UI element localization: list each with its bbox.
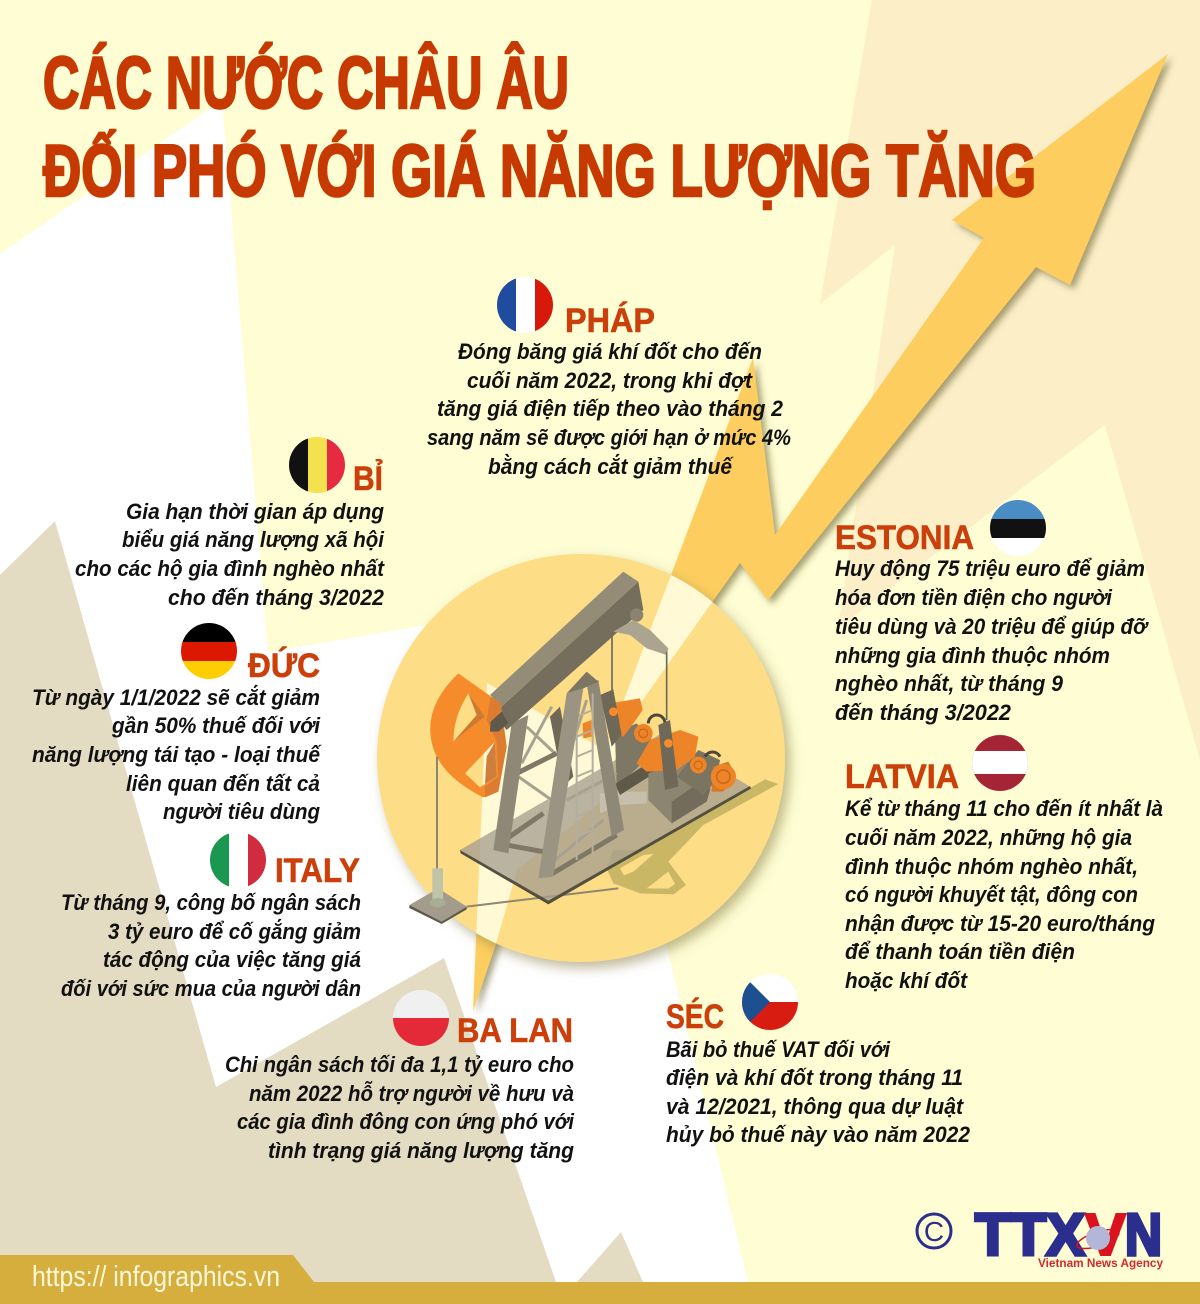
panel: Germany: liên quan đến tất cả [126, 771, 320, 796]
title [43, 43, 1036, 212]
rising arrow [473, 54, 1168, 1011]
panel: Italy: 3 tỷ euro để cố gắng giảm [108, 919, 361, 944]
panel: Belgium: cho đến tháng 3/2022 [168, 585, 385, 610]
icon: Italy flag [210, 832, 267, 888]
panel: Estonia [835, 500, 1149, 725]
panel: Italy [61, 832, 361, 1001]
icon: Latvia flag [972, 735, 1028, 791]
icon: Estonia flag [990, 500, 1046, 556]
footer bar with URL: https:// infographics.vn [32, 1261, 280, 1293]
panel: France: sang năm sẽ được giới hạn ở mức 4% [427, 425, 791, 450]
panel: Poland: Chi ngân sách tối đa 1,1 tỷ euro cho [225, 1052, 574, 1077]
icon: oil pump jack [409, 572, 778, 924]
panel: Czech Republic: Bãi bỏ thuế VAT đối với [666, 1037, 891, 1062]
icon: Czech flag [742, 974, 798, 1030]
panel: Latvia: LATVIA [845, 758, 959, 796]
panel: Poland [225, 990, 575, 1163]
panel: Estonia: hóa đơn tiền điện cho người [835, 585, 1113, 610]
panel: Czech Republic: SÉC [666, 998, 724, 1036]
panel: Germany: ĐỨC [248, 647, 320, 685]
panel: Poland: năm 2022 hỗ trợ người về hưu và [249, 1081, 574, 1106]
central circle with oil pump [374, 553, 797, 976]
panel: Latvia: hoặc khí đốt [845, 968, 969, 993]
title: CÁC NƯỚC CHÂU ÂU [43, 43, 569, 124]
panel: France: cuối năm 2022, trong khi đợt [467, 368, 754, 393]
panel: Italy: ITALY [275, 852, 360, 890]
panel: Latvia [845, 735, 1163, 993]
panel: Czech Republic: điện và khí đốt trong tháng 11 [666, 1065, 963, 1090]
panel: Germany: năng lượng tái tạo - loại thuế [32, 742, 323, 767]
panel: Germany: người tiêu dùng [163, 799, 321, 824]
logo: TTXVN Vietnam News Agency: TTX [975, 1202, 1085, 1268]
panel: Latvia: cuối năm 2022, những hộ gia [845, 825, 1132, 850]
panel: Italy: đối với sức mua của người dân [61, 976, 361, 1001]
panel: Estonia: Huy động 75 triệu euro để giảm [835, 556, 1145, 581]
panel: Estonia: ESTONIA [835, 519, 974, 557]
panel: Germany: Từ ngày 1/1/2022 sẽ cắt giảm [32, 685, 320, 710]
panel: Latvia: nhận được từ 15-20 euro/tháng [845, 911, 1156, 936]
panel: France: bằng cách cắt giảm thuế [488, 454, 735, 479]
panel: Belgium: cho các hộ gia đình nghèo nhất [75, 556, 386, 581]
panel: Czech Republic [666, 974, 971, 1147]
logo: TTXVN Vietnam News Agency: V [1085, 1202, 1126, 1268]
panel: Estonia: đến tháng 3/2022 [835, 700, 1012, 725]
logo: TTXVN Vietnam News Agency: N [1125, 1202, 1162, 1268]
panel: France: tăng giá điện tiếp theo vào tháng 2 [437, 396, 784, 421]
logo: TTXVN Vietnam News Agency: C [924, 1216, 944, 1247]
panel: Belgium [75, 437, 386, 610]
logo: TTXVN Vietnam News Agency [917, 1202, 1163, 1270]
panel: Latvia: đình thuộc nhóm nghèo nhất, [845, 854, 1138, 879]
panel: Estonia: tiêu dùng và 20 triệu để giúp đỡ [835, 614, 1149, 639]
panel: Latvia: có người khuyết tật, đông con [845, 882, 1138, 907]
panel: Poland: BA LAN [457, 1012, 573, 1050]
panel: Poland: tình trạng giá năng lượng tăng [268, 1138, 575, 1163]
panel: Latvia: Kể từ tháng 11 cho đến ít nhất là [845, 796, 1163, 821]
panel: Czech Republic: hủy bỏ thuế này vào năm 2022 [666, 1122, 971, 1147]
icon: Belgium flag [289, 437, 346, 493]
panel: Estonia: nghèo nhất, từ tháng 9 [835, 671, 1064, 696]
panel: Belgium: biểu giá năng lượng xã hội [122, 527, 385, 552]
panel: Belgium: Gia hạn thời gian áp dụng [126, 499, 385, 524]
panel: Latvia: để thanh toán tiền điện [845, 939, 1075, 964]
icon: Poland flag [393, 990, 449, 1046]
panel: Italy: Từ tháng 9, công bố ngân sách [61, 890, 361, 915]
panel: Germany [32, 623, 323, 824]
icon: France flag [497, 277, 554, 333]
panel: France: PHÁP [565, 302, 655, 340]
panel: Italy: tác động của việc tăng giá [103, 947, 361, 972]
panel: Czech Republic: và 12/2021, thông qua dự luật [666, 1094, 965, 1119]
panel: France [427, 277, 791, 479]
icon: Germany flag [181, 623, 237, 679]
panel: Estonia: những gia đình thuộc nhóm [835, 643, 1110, 668]
panel: Germany: gần 50% thuế đối với [111, 713, 321, 738]
panel: Poland: các gia đình đông con ứng phó với [237, 1109, 575, 1134]
panel: France: Đóng băng giá khí đốt cho đến [458, 339, 762, 364]
footer bar with URL [0, 1255, 1200, 1304]
panel: Belgium: BỈ [353, 460, 383, 498]
logo: TTXVN Vietnam News Agency: Vietnam News Agency [1038, 1256, 1163, 1270]
